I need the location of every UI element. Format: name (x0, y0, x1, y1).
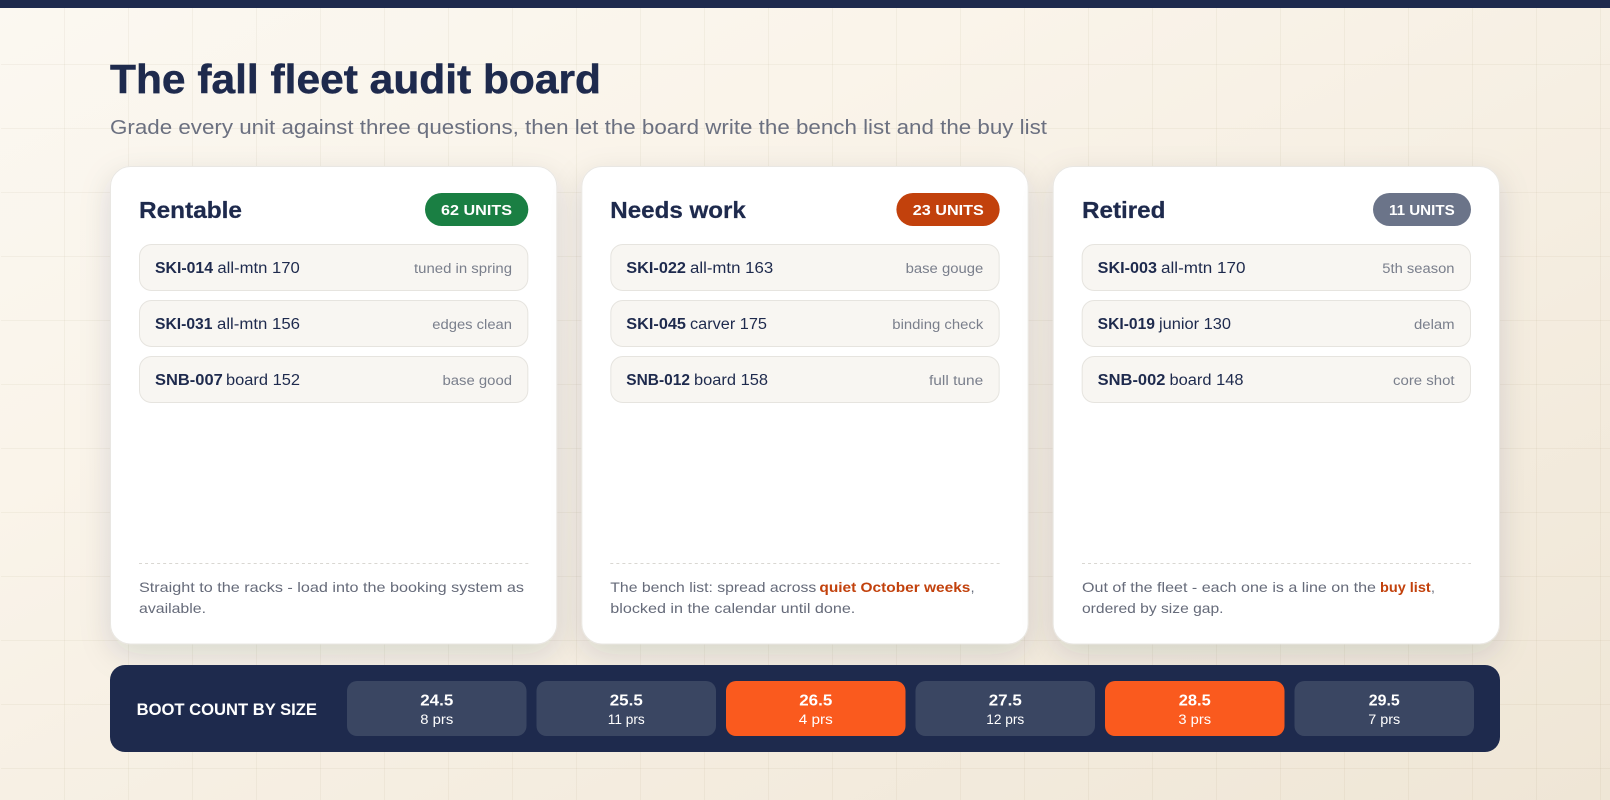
badge: 11 units: 11 UNITS (1389, 202, 1455, 219)
row: SKI-022: base gouge (906, 261, 983, 276)
chip: size 24.5: 24.5 (420, 692, 454, 710)
label: boot count by size: BOOT COUNT BY SIZE (137, 701, 317, 719)
row: SNB-007 (140, 356, 528, 402)
note: rentable: available. (139, 600, 206, 616)
heading: needs work: Needs work (610, 197, 746, 223)
row: SNB-012: SNB-012 (626, 372, 690, 389)
row: SNB-012: full tune (929, 373, 983, 388)
row: SNB-007: SNB-007 (155, 372, 223, 389)
heading: retired: Retired (1082, 197, 1165, 223)
title: The fall fleet audit board (110, 56, 601, 102)
row: SNB-007: base good (442, 373, 512, 388)
row: SKI-031: SKI-031 (155, 316, 213, 333)
panel: boot count by size (110, 665, 1500, 752)
row: SKI-031 (140, 300, 528, 346)
badge: 23 units (896, 193, 1000, 226)
row: SKI-045: binding check (892, 317, 984, 332)
row: SNB-002 (1082, 356, 1470, 402)
chip: size 29.5: 7 prs (1368, 711, 1400, 727)
row: SKI-019: SKI-019 (1098, 316, 1155, 333)
row: SNB-012 (611, 356, 999, 402)
note: retired (1082, 579, 1435, 616)
note: needs work: , (971, 579, 974, 595)
badge: 62 units (425, 193, 528, 226)
row: SKI-045: carver 175 (690, 316, 767, 333)
row: SKI-014: tuned in spring (414, 261, 512, 276)
chip: size 27.5: 12 prs (986, 711, 1024, 727)
row: SKI-022: SKI-022 (626, 260, 686, 277)
row: SNB-002: SNB-002 (1098, 372, 1165, 389)
badge: 62 units: 62 UNITS (441, 202, 512, 219)
row: SKI-031: edges clean (432, 317, 512, 332)
note: needs work: The bench list: spread across (610, 579, 816, 595)
note: retired: ordered by size gap. (1082, 600, 1224, 616)
chip: size 27.5: 27.5 (989, 692, 1022, 710)
row: SKI-003: SKI-003 (1098, 260, 1157, 277)
row: SKI-019 (1082, 300, 1470, 346)
chip: size 26.5 highlighted: 26.5 (799, 692, 833, 710)
note: needs work (610, 579, 974, 616)
chip: size 25.5: 25.5 (610, 692, 643, 710)
row: SNB-002: core shot (1393, 373, 1455, 388)
chip: size 26.5 highlighted (726, 681, 906, 736)
row: SKI-019: junior 130 (1158, 316, 1231, 333)
chip: size 27.5 (916, 681, 1095, 736)
badge: 23 units: 23 UNITS (913, 202, 984, 219)
row: SKI-045: SKI-045 (626, 316, 686, 333)
note: rentable: Straight to the racks - load into the booking system as (139, 579, 524, 595)
note: rentable (139, 579, 524, 616)
chip: size 29.5: 29.5 (1369, 692, 1400, 710)
note: retired: buy list (1380, 579, 1431, 595)
row: SKI-003 (1082, 244, 1470, 290)
row: SKI-014: all-mtn 170 (217, 260, 300, 277)
row: SKI-019: delam (1414, 317, 1455, 332)
note: retired: Out of the fleet - each one is a line on the (1082, 579, 1376, 595)
chip: size 28.5 highlighted: 3 prs (1178, 711, 1211, 727)
panel: rentable (110, 166, 557, 644)
chip: size 25.5: 11 prs (608, 711, 645, 727)
chip: size 28.5 highlighted: 28.5 (1179, 692, 1211, 710)
row: SKI-045 (611, 300, 999, 346)
row: SKI-022 (611, 244, 999, 290)
row: SKI-003: 5th season (1382, 261, 1454, 276)
chip: size 28.5 highlighted (1105, 681, 1284, 736)
chip: size 24.5 (347, 681, 526, 736)
chip: size 29.5 (1294, 681, 1474, 736)
subtitle: Grade every unit against three questions, then let the board write the bench list and the buy list (110, 117, 1047, 139)
row: SNB-007: board 152 (226, 372, 300, 389)
panel: retired (1053, 166, 1500, 644)
panel: needs work (582, 166, 1028, 644)
row: SNB-002: board 148 (1170, 372, 1244, 389)
chip: size 25.5 (536, 681, 716, 736)
row: SKI-014 (140, 244, 528, 290)
row: SKI-014: SKI-014 (155, 260, 213, 277)
chip: size 26.5 highlighted: 4 prs (799, 711, 833, 727)
heading: rentable: Rentable (139, 197, 242, 223)
note: retired: , (1431, 579, 1435, 595)
row: SKI-031: all-mtn 156 (217, 316, 300, 333)
note: needs work: blocked in the calendar until done. (610, 600, 855, 616)
row: SKI-003: all-mtn 170 (1161, 260, 1246, 277)
row: SNB-012: board 158 (694, 372, 768, 389)
badge: 11 units (1373, 193, 1471, 226)
row: SKI-022: all-mtn 163 (690, 260, 773, 277)
note: needs work: quiet October weeks (819, 579, 971, 595)
chip: size 24.5: 8 prs (420, 711, 453, 727)
